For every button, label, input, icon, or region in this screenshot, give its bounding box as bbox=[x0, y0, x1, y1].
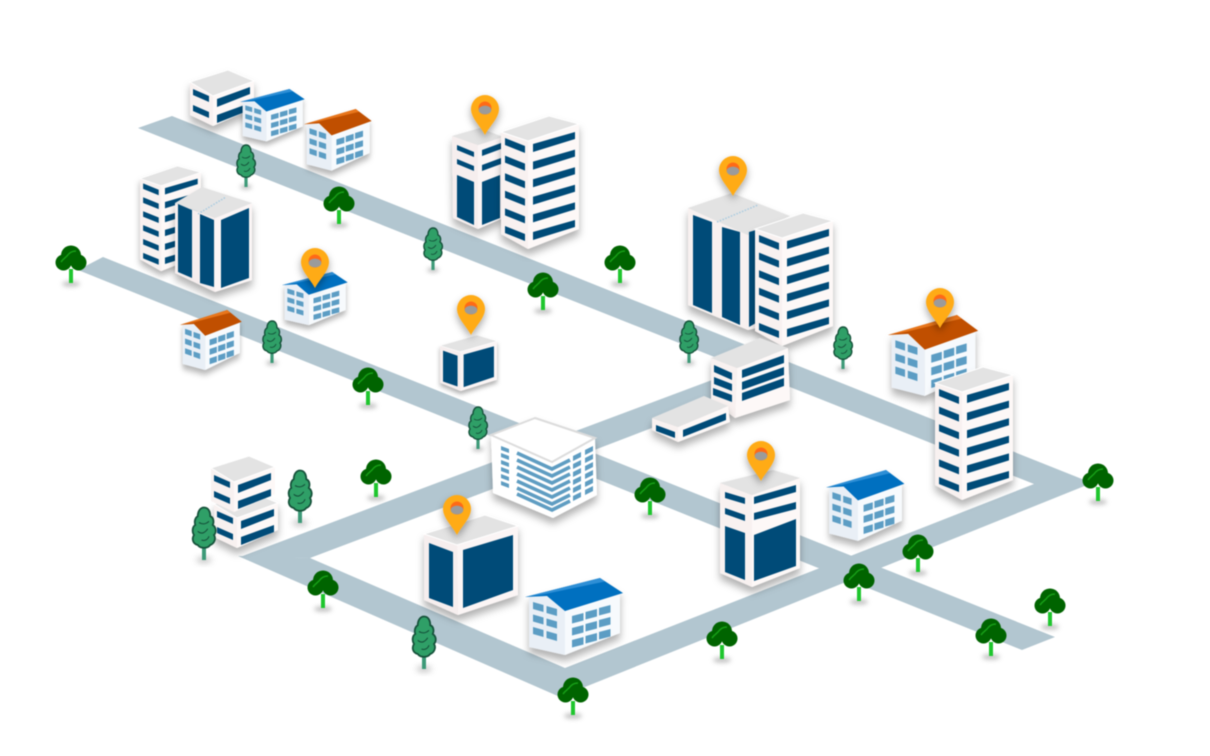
building: left tower bbox=[140, 166, 201, 271]
tree: road 1 pine a bbox=[237, 145, 255, 189]
tree: far right corner bbox=[1082, 464, 1114, 504]
building: large dark cluster bbox=[688, 193, 790, 330]
building: central white office bbox=[491, 418, 597, 518]
tree: round right a bbox=[902, 534, 934, 576]
pin: orange house bbox=[926, 288, 954, 328]
tree: round bottom bbox=[706, 622, 738, 662]
pin: small dark block bbox=[457, 295, 485, 335]
tree: road 1 pine b bbox=[424, 228, 442, 272]
building: top blue house bbox=[240, 89, 305, 141]
road: lower left bbox=[238, 556, 575, 697]
pin: blue house bbox=[301, 248, 329, 288]
building: blue house bottom bbox=[525, 578, 623, 655]
tree: round far right bbox=[1034, 588, 1066, 630]
building: top-left block bbox=[190, 70, 254, 126]
pin: large cluster bbox=[719, 156, 747, 196]
tree: pine left of stack bbox=[193, 508, 216, 562]
tree: round lower left bbox=[308, 570, 338, 612]
building: low block bbox=[652, 396, 730, 442]
tree: pine lower left bbox=[413, 616, 436, 672]
tree: pine right of cluster bbox=[834, 327, 852, 371]
pin: central top tower bbox=[471, 95, 499, 135]
road: left cross street bbox=[240, 380, 712, 558]
tree: pine right of stack bbox=[289, 470, 312, 526]
tree: round by cross street bbox=[360, 460, 392, 500]
tree: road 2 pine a bbox=[263, 321, 281, 365]
tree: road 2 round a bbox=[352, 368, 384, 408]
tree: pine by center bbox=[469, 407, 487, 451]
building: small dark block bbox=[440, 335, 497, 391]
building: right tower bbox=[935, 367, 1013, 500]
building: large cluster tower bbox=[755, 213, 833, 346]
tree: pine by cluster bbox=[680, 321, 698, 365]
road: middle diagonal bbox=[78, 257, 1055, 650]
tree: road 1 round b bbox=[528, 272, 558, 314]
tree: round road end bbox=[976, 618, 1006, 660]
building: blue house right bbox=[826, 470, 904, 541]
building: stacked block lower bbox=[214, 492, 278, 548]
building: dark block with pin bbox=[424, 515, 518, 615]
building: top orange house bbox=[304, 109, 372, 171]
pin: dark block bbox=[443, 495, 471, 535]
tree: far left bbox=[56, 246, 86, 286]
building: three-row block bbox=[711, 338, 790, 418]
tree: round bottom corner bbox=[558, 678, 588, 718]
road: lower right bbox=[560, 470, 1092, 697]
building: left dark block bbox=[175, 187, 252, 292]
pin: two-row tower bbox=[747, 441, 775, 481]
road network bbox=[78, 116, 1092, 697]
tree: road 1 round a bbox=[324, 186, 354, 228]
tree: round right of center bbox=[634, 478, 666, 518]
tree: road 1 round c bbox=[604, 246, 636, 286]
road: upper diagonal bbox=[138, 116, 1092, 484]
building: blue house with pin bbox=[282, 272, 348, 325]
tree: round right b bbox=[844, 564, 874, 604]
building: orange house left bbox=[180, 310, 242, 370]
building: two-row dark tower bbox=[720, 470, 800, 587]
building: stacked block upper bbox=[211, 456, 275, 512]
building: orange house right bbox=[888, 315, 978, 396]
building: central top two-part left bbox=[452, 128, 503, 229]
building: central top tower bbox=[501, 116, 579, 249]
